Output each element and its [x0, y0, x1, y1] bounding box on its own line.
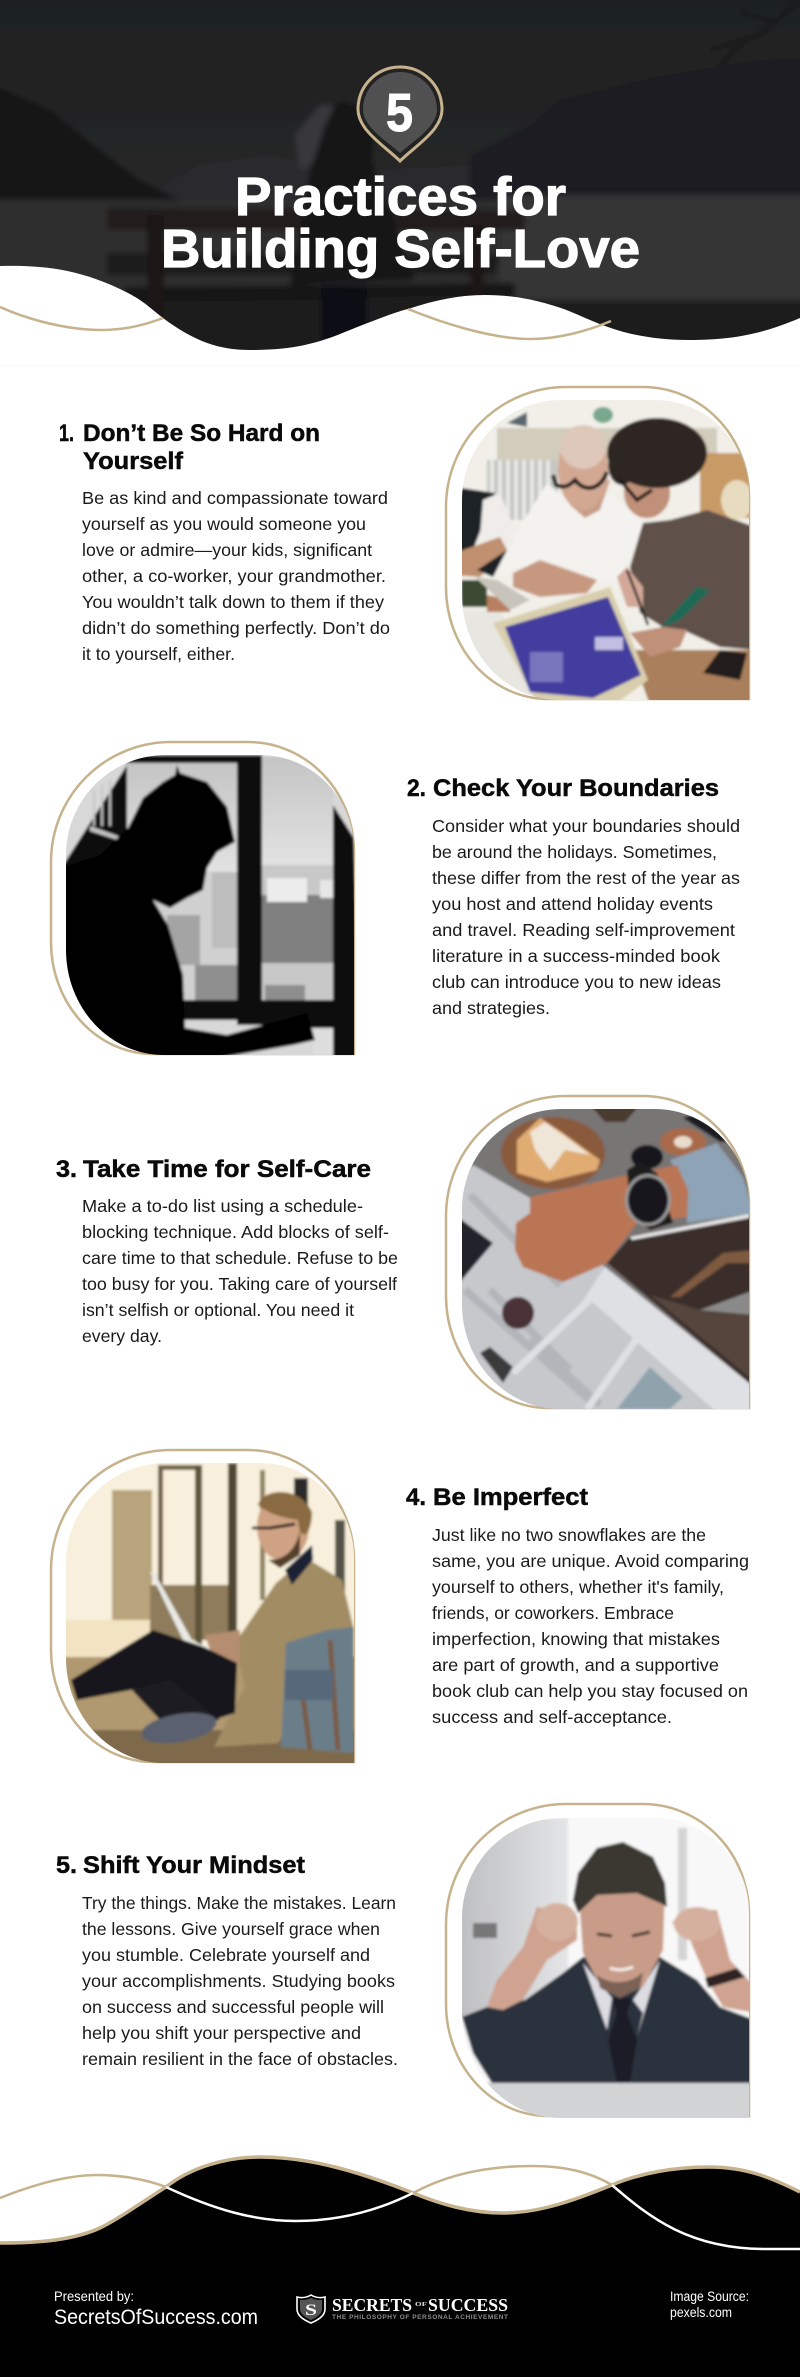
- body text 4: success and self-acceptance.: [432, 1707, 672, 1727]
- body text 3: blocking technique. Add blocks of self-: [82, 1222, 389, 1242]
- white wave under header: [0, 266, 800, 365]
- body text 4: book club can help you stay focused on: [432, 1681, 748, 1701]
- body text 1: You wouldn’t talk down to them if they: [82, 592, 384, 612]
- body text 2: [432, 816, 740, 1018]
- body text 2: you host and attend holiday events: [432, 894, 713, 914]
- body text 5: you stumble. Celebrate yourself and: [82, 1945, 370, 1965]
- logo: [297, 2295, 508, 2323]
- body text 1: love or admire—your kids, significant: [82, 540, 372, 560]
- body text 2: Consider what your boundaries should: [432, 816, 740, 836]
- photo: man with laptop sitting on floor: [60, 1458, 360, 1770]
- image frame 4: [51, 1450, 354, 1762]
- title: [161, 167, 640, 279]
- heading 2: 2.: [407, 775, 426, 802]
- body text 5: the lessons. Give yourself grace when: [82, 1919, 380, 1939]
- photo: wrist watch over newspaper: [455, 1105, 755, 1415]
- body text 3: too busy for you. Taking care of yourself: [82, 1274, 397, 1294]
- logo wordmark: THE PHILOSOPHY OF PERSONAL ACHIEVEMENT: [332, 2314, 508, 2321]
- white wave on black right: [612, 2185, 800, 2249]
- heading 5: 5.: [56, 1852, 77, 1879]
- body text 5: Try the things. Make the mistakes. Learn: [82, 1893, 396, 1913]
- body text 1: it to yourself, either.: [82, 644, 235, 664]
- photo: silhouette of man at window: [60, 750, 360, 1060]
- body text 4: [432, 1525, 749, 1727]
- body text 5: [82, 1893, 398, 2069]
- thin gold wave left: [0, 2175, 166, 2198]
- image frame 1: [446, 387, 749, 699]
- logo wordmark: SECRETS: [332, 2295, 412, 2315]
- gold wave left: [0, 307, 163, 330]
- title: Practices for: [235, 167, 566, 227]
- body text 4: Just like no two snowflakes are the: [432, 1525, 706, 1545]
- body text 1: other, a co-worker, your grandmother.: [82, 566, 386, 586]
- icon: number pin: [358, 67, 442, 161]
- body text 1: Be as kind and compassionate toward: [82, 488, 388, 508]
- photo: excited man in suit: [455, 1812, 755, 2123]
- presented by: Presented by:: [54, 2288, 134, 2304]
- body text 4: yourself to others, whether it's family,: [432, 1577, 724, 1597]
- pin number: 5: [386, 83, 413, 143]
- panel: practice 2: [51, 742, 740, 1060]
- body text 1: [82, 488, 390, 664]
- panel: header: [0, 0, 800, 365]
- body text 3: care time to that schedule. Refuse to be: [82, 1248, 398, 1268]
- body text 3: Make a to-do list using a schedule-: [82, 1196, 363, 1216]
- body text 2: and strategies.: [432, 998, 550, 1018]
- panel: practice 3: [56, 1096, 755, 1415]
- panel: practice 4: [51, 1450, 749, 1770]
- heading 4: Be Imperfect: [433, 1484, 588, 1511]
- image frame 5: [446, 1804, 749, 2116]
- white wave on black left: [166, 2187, 413, 2221]
- thick gold wave on footer edge: [0, 2157, 800, 2243]
- body text 5: on success and successful people will: [82, 1997, 384, 2017]
- heading 1: Don’t Be So Hard on: [83, 420, 320, 447]
- presented by: [54, 2288, 258, 2329]
- body text 2: club can introduce you to new ideas: [432, 972, 721, 992]
- body text 2: and travel. Reading self-improvement: [432, 920, 735, 940]
- body text 5: help you shift your perspective and: [82, 2023, 361, 2043]
- body text 4: friends, or coworkers. Embrace: [432, 1603, 674, 1623]
- heading 1: 1.: [59, 420, 74, 447]
- heading 1: [59, 420, 320, 475]
- panel: practice 5: [56, 1804, 755, 2123]
- heading 4: 4.: [406, 1484, 426, 1511]
- heading 2: Check Your Boundaries: [433, 775, 719, 802]
- body text 3: every day.: [82, 1326, 162, 1346]
- body text 5: your accomplishments. Studying books: [82, 1971, 395, 1991]
- panel: footer: [0, 2157, 800, 2377]
- body text 4: same, you are unique. Avoid comparing: [432, 1551, 749, 1571]
- icon: shield: [297, 2295, 325, 2323]
- body text 2: literature in a success-minded book: [432, 946, 720, 966]
- logo wordmark: SUCCESS: [428, 2295, 508, 2315]
- heading 5: Shift Your Mindset: [83, 1852, 305, 1879]
- image source: [670, 2289, 749, 2320]
- heading 3: 3.: [56, 1156, 77, 1183]
- heading 3: Take Time for Self-Care: [83, 1156, 371, 1183]
- gold wave right: [408, 309, 611, 339]
- thin gold wave middle: [413, 2166, 612, 2193]
- body text 3: [82, 1196, 398, 1346]
- image frame 2: [51, 742, 354, 1054]
- title: Building Self-Love: [161, 219, 640, 279]
- image frame 3: [446, 1096, 749, 1408]
- body text 2: be around the holidays. Sometimes,: [432, 842, 717, 862]
- body text 3: isn’t selfish or optional. You need it: [82, 1300, 354, 1320]
- icon: shield: S: [305, 2302, 317, 2319]
- body text 1: didn’t do something perfectly. Don’t do: [82, 618, 390, 638]
- heading 1: Yourself: [83, 448, 184, 475]
- header photo: person on a bench by a lake: [0, 0, 800, 360]
- body text 5: remain resilient in the face of obstacles.: [82, 2049, 398, 2069]
- presented by: SecretsOfSuccess.com: [54, 2306, 258, 2329]
- body text 4: imperfection, knowing that mistakes: [432, 1629, 720, 1649]
- photo: two people at a tablet: [455, 395, 755, 705]
- image source: Image Source:: [670, 2289, 749, 2304]
- body text 4: are part of growth, and a supportive: [432, 1655, 719, 1675]
- footer black wave background: [0, 2157, 800, 2377]
- logo wordmark: [332, 2295, 508, 2321]
- body text 1: yourself as you would someone you: [82, 514, 366, 534]
- panel: practice 1: [59, 387, 755, 705]
- image source: pexels.com: [670, 2305, 732, 2320]
- logo wordmark: OF: [415, 2302, 427, 2308]
- body text 2: these differ from the rest of the year as: [432, 868, 740, 888]
